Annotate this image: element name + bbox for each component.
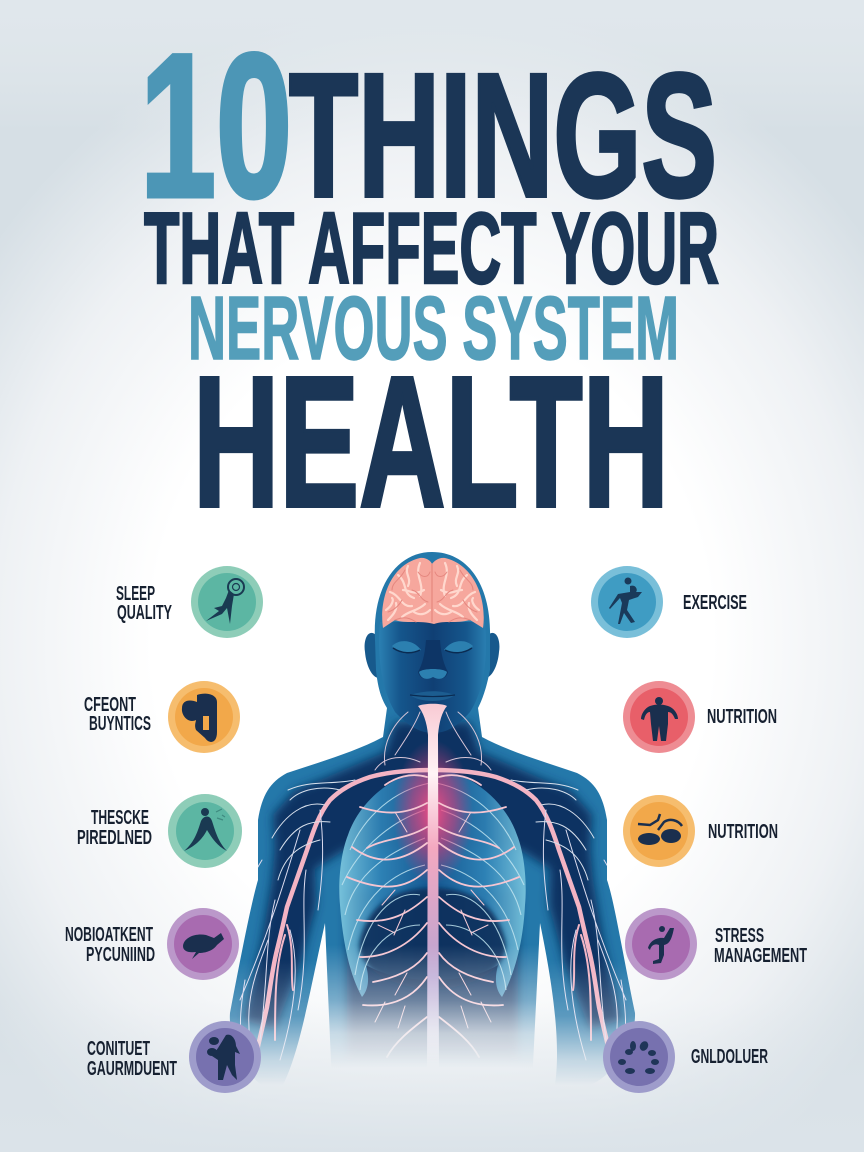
label: sleep quality: QUALITY <box>117 602 172 624</box>
label: thescke piredlned: PIREDLNED <box>77 827 152 849</box>
label: stress management: MANAGEMENT <box>714 945 807 967</box>
label: conituet gaurmduent: CONITUET <box>87 1038 150 1060</box>
label: stress management <box>714 925 807 967</box>
label: nobioatkent pycuniind: NOBIOATKENT <box>65 924 153 946</box>
label: thescke piredlned: THESCKE <box>91 807 149 829</box>
icon: ears <box>365 633 499 678</box>
label: stress management: STRESS <box>715 925 764 947</box>
brain <box>382 558 484 628</box>
label: conituet gaurmduent <box>87 1038 177 1080</box>
lungs ribcage <box>339 768 526 997</box>
label: nobioatkent pycuniind: PYCUNIIND <box>86 944 155 966</box>
icon: thescke <box>168 794 242 868</box>
icon: conituet <box>189 1021 261 1093</box>
label: thescke piredlned <box>77 807 152 849</box>
label: nobioatkent pycuniind <box>65 924 155 966</box>
icon: sleep <box>191 566 263 638</box>
spinal cord <box>418 704 447 1075</box>
item: thescke piredlned <box>77 794 242 868</box>
icon: nobioatkent <box>167 908 239 980</box>
face <box>387 622 479 732</box>
label: cfeont buyntics: BUYNTICS <box>89 713 151 735</box>
item: cfeont buyntics <box>84 681 240 753</box>
body silhouette <box>230 552 635 1085</box>
label: gnldoluer: GNLDOLUER <box>691 1046 768 1068</box>
icon: organ <box>603 1021 675 1093</box>
title <box>140 12 719 546</box>
label: sleep quality: SLEEP <box>116 583 155 605</box>
item: nobioatkent pycuniind <box>65 908 239 980</box>
label: cfeont buyntics <box>84 694 151 735</box>
item: nutrition red <box>623 681 777 753</box>
title number 10: 10 <box>140 12 292 240</box>
item: sleep quality <box>116 566 263 638</box>
icon: exercise <box>591 566 663 638</box>
panel: right factors <box>591 566 807 1093</box>
icon: cfeont <box>168 681 240 753</box>
nerve branches <box>232 712 634 1060</box>
glow at upper spine <box>393 740 473 884</box>
panel: left factors <box>65 566 263 1093</box>
icon: stress <box>625 908 697 980</box>
item: gnldoluer <box>603 1021 768 1093</box>
label: nutrition: NUTRITION <box>708 821 778 843</box>
label: exercise: EXERCISE <box>683 592 747 614</box>
item: conituet gaurmduent <box>87 1021 261 1093</box>
label: conituet gaurmduent: GAURMDUENT <box>87 1058 177 1080</box>
item: nutrition orange <box>623 795 778 867</box>
item: exercise <box>591 566 747 638</box>
ribs <box>342 783 524 990</box>
icon: figure <box>623 681 695 753</box>
icon: food <box>623 795 695 867</box>
label: nutrition: NUTRITION <box>707 706 777 728</box>
label: cfeont buyntics: CFEONT <box>84 694 136 716</box>
human figure illustration <box>230 552 635 1085</box>
label: sleep quality <box>116 583 172 624</box>
item: stress management <box>625 908 807 980</box>
